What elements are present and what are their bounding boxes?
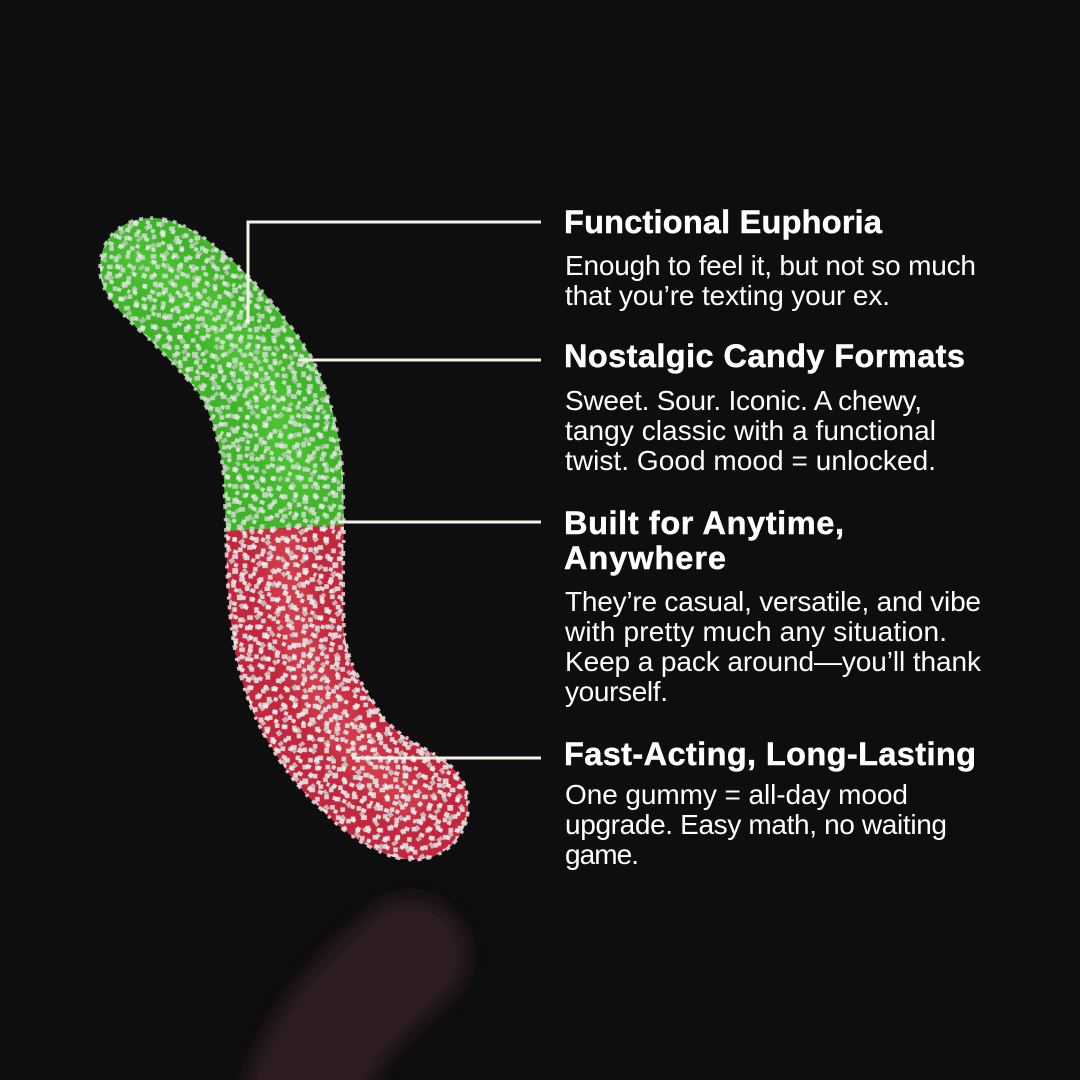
heading: Functional Euphoria (564, 204, 883, 240)
illustration: sour gummy worm (90, 210, 475, 870)
worm green half (100, 218, 344, 531)
text block: fast-acting, long-lasting (564, 736, 976, 870)
blurred gummy reflection (298, 955, 410, 1080)
heading: Built for Anytime, (564, 505, 844, 541)
text block: built for anytime, anywhere (564, 505, 982, 707)
body: with pretty much any situation. (564, 616, 947, 647)
worm red half (220, 520, 475, 870)
heading (564, 505, 844, 576)
body: They’re casual, versatile, and vibe (565, 586, 981, 617)
body (565, 250, 976, 311)
body (565, 385, 936, 476)
body: Sweet. Sour. Iconic. A chewy, (565, 385, 922, 416)
heading: Nostalgic Candy Formats (564, 338, 965, 374)
body: upgrade. Easy math, no waiting (565, 809, 947, 840)
heading: Fast-Acting, Long-Lasting (564, 736, 976, 772)
body: One gummy = all-day mood (565, 779, 908, 810)
body: yourself. (565, 676, 668, 707)
text block: nostalgic candy formats (564, 338, 965, 476)
body: tangy classic with a functional (565, 415, 936, 446)
body: Enough to feel it, but not so much (565, 250, 976, 281)
text block: functional euphoria (564, 204, 976, 311)
body: game. (565, 839, 639, 870)
connector: functional euphoria (248, 222, 541, 323)
body: twist. Good mood = unlocked. (565, 445, 936, 476)
connector: built for anytime (338, 520, 541, 524)
connector: nostalgic candy formats (298, 358, 541, 362)
connector: fast-acting (352, 756, 541, 760)
heading: Anywhere (564, 540, 726, 576)
body (565, 779, 947, 870)
body: that you’re texting your ex. (565, 280, 890, 311)
body (564, 586, 982, 707)
body: Keep a pack around—you’ll thank (565, 646, 982, 677)
